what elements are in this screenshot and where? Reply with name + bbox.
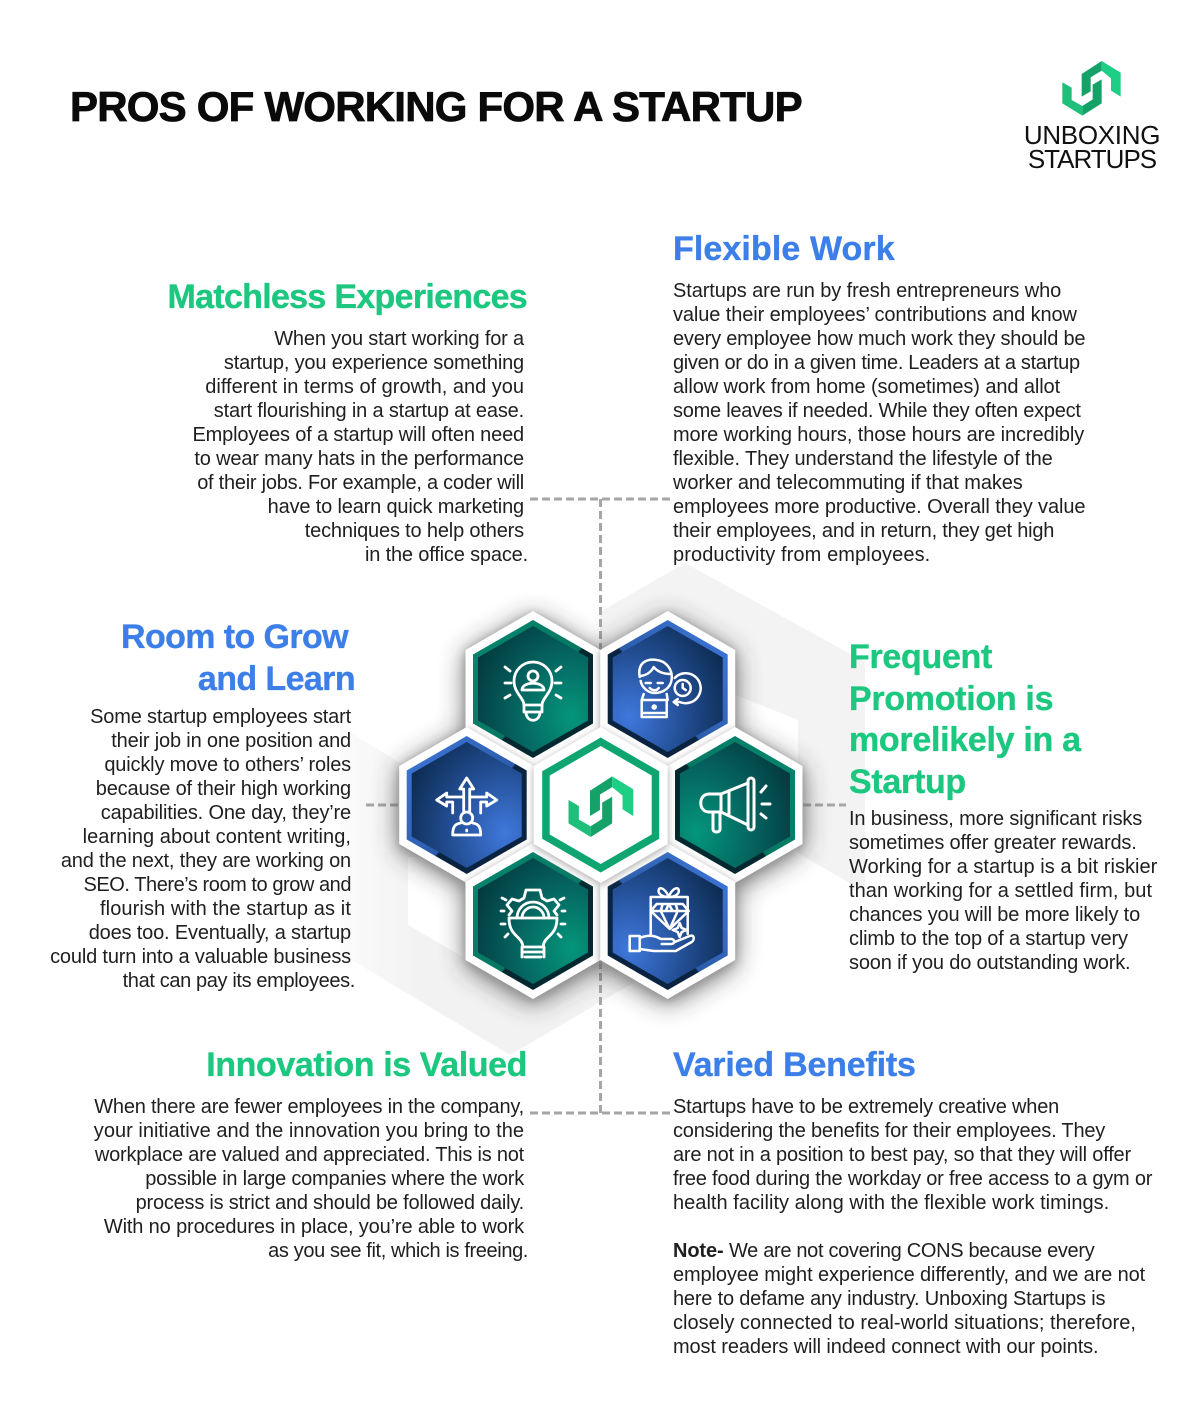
text: Flexible Work: worker and telecommuting if that makes xyxy=(673,472,1023,494)
center logo mark xyxy=(569,776,633,837)
text: Frequent Promotion: chances you will be more likely to xyxy=(849,904,1140,926)
connector: right xyxy=(803,804,846,806)
note: closely connected to real-world situations; therefore, xyxy=(673,1312,1136,1334)
note: employee might experience differently, and we are not xyxy=(673,1264,1145,1286)
text: Matchless Experiences: techniques to help others xyxy=(305,520,524,542)
note: Note- We are not covering CONS because every xyxy=(673,1240,1094,1262)
icon: person at crossroads xyxy=(437,778,497,835)
text: Matchless Experiences: start flourishing in a startup at ease. xyxy=(214,400,524,422)
text: Room to Grow and Learn: learning about content writing, xyxy=(83,826,351,848)
hexagon cluster shadow xyxy=(399,616,802,1004)
text: Matchless Experiences: Employees of a startup will often need xyxy=(192,424,524,446)
text: Matchless Experiences: in the office space. xyxy=(365,544,528,566)
text: Flexible Work xyxy=(673,280,1085,566)
heading: Room to Grow and Learn xyxy=(121,618,355,698)
hex: center logo xyxy=(534,727,668,885)
connector: top xyxy=(530,499,670,660)
logo wordmark xyxy=(1024,120,1160,174)
logo wordmark: UNBOXING xyxy=(1024,120,1160,150)
heading: Room to Grow and Learn: and Learn xyxy=(198,660,355,698)
text: Frequent Promotion xyxy=(849,808,1157,974)
header logo mark xyxy=(1062,61,1121,116)
text: Flexible Work: every employee how much work they should be xyxy=(673,328,1085,350)
hex: bottom left gear bulb xyxy=(466,843,600,1001)
heading: Frequent Promotion: Startup xyxy=(849,763,966,801)
text: Room to Grow and Learn: and the next, they are working on xyxy=(61,850,351,872)
text: Innovation is Valued xyxy=(94,1096,528,1262)
text: Matchless Experiences: When you start working for a xyxy=(274,328,524,350)
text: Flexible Work: value their employees’ contributions and know xyxy=(673,304,1077,326)
text: Matchless Experiences: to wear many hats in the performance xyxy=(194,448,524,470)
heading: Frequent Promotion xyxy=(849,638,1082,801)
heading: Frequent Promotion: morelikely in a xyxy=(849,721,1081,759)
text: Matchless Experiences xyxy=(192,328,528,566)
text: Frequent Promotion: climb to the top of a startup very xyxy=(849,928,1128,950)
text: Room to Grow and Learn: capabilities. One day, they’re xyxy=(101,802,351,824)
text: Flexible Work: employees more productive. Overall they value xyxy=(673,496,1085,518)
text: Frequent Promotion: soon if you do outstanding work. xyxy=(849,952,1130,974)
text: Frequent Promotion: Working for a startup is a bit riskier xyxy=(849,856,1157,878)
text: Varied Benefits: Startups have to be extremely creative when xyxy=(673,1096,1059,1118)
heading: Varied Benefits: Varied Benefits xyxy=(673,1046,916,1084)
icon: megaphone xyxy=(701,778,770,832)
text: Flexible Work: allow work from home (sometimes) and allot xyxy=(673,376,1060,398)
icon: lightbulb with person xyxy=(505,662,561,720)
text: Varied Benefits xyxy=(673,1096,1152,1214)
text: Varied Benefits: are not in a position to best pay, so that they will offer xyxy=(673,1144,1131,1166)
note xyxy=(673,1240,1146,1358)
text: Innovation is Valued: your initiative and the innovation you bring to the xyxy=(94,1120,524,1142)
text: Innovation is Valued: as you see fit, which is freeing. xyxy=(268,1240,528,1262)
connector: left xyxy=(366,804,398,806)
text: Flexible Work: flexible. They understand the lifestyle of the xyxy=(673,448,1053,470)
note: most readers will indeed connect with our points. xyxy=(673,1336,1098,1358)
text: Matchless Experiences: different in terms of growth, and you xyxy=(205,376,524,398)
text: Room to Grow and Learn: that can pay its employees. xyxy=(123,970,355,992)
text: Innovation is Valued: process is strict and should be followed daily. xyxy=(136,1192,524,1214)
text: Varied Benefits: considering the benefits for their employees. They xyxy=(673,1120,1105,1142)
hex: left crossroads arrows xyxy=(399,727,534,885)
text: Matchless Experiences: of their jobs. For example, a coder will xyxy=(197,472,524,494)
text: Varied Benefits: free food during the workday or free access to a gym or xyxy=(673,1168,1152,1190)
text: Room to Grow and Learn: because of their high working xyxy=(96,778,351,800)
text: Flexible Work: Startups are run by fresh entrepreneurs who xyxy=(673,280,1061,302)
text: Room to Grow and Learn: SEO. There’s room to grow and xyxy=(84,874,351,896)
icon: hand holding diamond gift xyxy=(630,888,694,951)
text: Room to Grow and Learn xyxy=(50,706,355,992)
hex: right megaphone xyxy=(668,727,802,885)
text: Matchless Experiences: have to learn quick marketing xyxy=(268,496,524,518)
note: here to defame any industry. Unboxing Startups is xyxy=(673,1288,1105,1310)
text: Varied Benefits: health facility along with the flexible work timings. xyxy=(673,1192,1109,1214)
heading: Flexible Work: Flexible Work xyxy=(673,230,895,268)
heading: Frequent Promotion: Promotion is xyxy=(849,680,1053,718)
background hexagon right xyxy=(600,563,865,892)
text: Innovation is Valued: When there are fewer employees in the company, xyxy=(94,1096,524,1118)
hex: top left lightbulb person xyxy=(466,611,600,769)
connector: bottom xyxy=(530,960,670,1113)
logo wordmark: STARTUPS xyxy=(1028,144,1156,174)
text: Innovation is Valued: workplace are valued and appreciated. This is not xyxy=(95,1144,524,1166)
text: Frequent Promotion: than working for a settled firm, but xyxy=(849,880,1152,902)
text: Innovation is Valued: possible in large companies where the work xyxy=(145,1168,524,1190)
text: Flexible Work: given or do in a given time. Leaders at a startup xyxy=(673,352,1080,374)
text: Flexible Work: productivity from employees. xyxy=(673,544,930,566)
text: Frequent Promotion: In business, more significant risks xyxy=(849,808,1142,830)
text: Room to Grow and Learn: does too. Eventually, a startup xyxy=(89,922,351,944)
text: Room to Grow and Learn: quickly move to others’ roles xyxy=(104,754,351,776)
text: Flexible Work: some leaves if needed. While they often expect xyxy=(673,400,1081,422)
heading: Room to Grow and Learn: Room to Grow xyxy=(121,618,348,656)
text: Frequent Promotion: sometimes offer greater rewards. xyxy=(849,832,1137,854)
icon: gear lightbulb xyxy=(501,890,565,957)
text: Room to Grow and Learn: their job in one position and xyxy=(111,730,351,752)
text: Innovation is Valued: With no procedures in place, you’re able to work xyxy=(104,1216,524,1238)
heading: Matchless Experiences: Matchless Experiences xyxy=(168,278,527,316)
title: PROS OF WORKING FOR A STARTUP xyxy=(70,83,802,130)
text: Flexible Work: more working hours, those hours are incredibly xyxy=(673,424,1084,446)
text: Flexible Work: their employees, and in return, they get high xyxy=(673,520,1054,542)
text: Room to Grow and Learn: could turn into a valuable business xyxy=(50,946,351,968)
text: Matchless Experiences: startup, you experience something xyxy=(224,352,524,374)
background hexagon left xyxy=(340,726,640,1055)
heading: Frequent Promotion: Frequent xyxy=(849,638,992,676)
text: Room to Grow and Learn: flourish with the startup as it xyxy=(100,898,351,920)
text: Room to Grow and Learn: Some startup employees start xyxy=(90,706,351,728)
heading: Innovation is Valued: Innovation is Valued xyxy=(206,1046,527,1084)
hex: bottom right gift diamond xyxy=(600,843,735,1001)
icon: employee with laptop and clock xyxy=(639,660,701,717)
hex: top right employee with clock xyxy=(600,611,735,769)
